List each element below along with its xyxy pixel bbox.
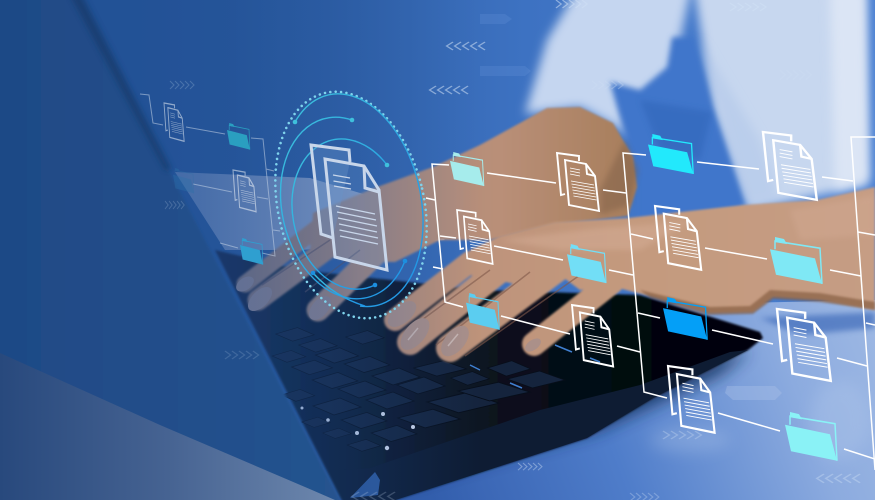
- light table band behind keyboard: [175, 172, 445, 250]
- left faded network connectors: [140, 94, 280, 256]
- blue shirt interior: [610, 37, 745, 222]
- back hand finger gaps: [262, 240, 360, 292]
- faded folder upper left: [227, 123, 250, 150]
- document icon 4: [572, 305, 613, 366]
- faint arrow bands: [480, 14, 531, 76]
- desk surface: [340, 300, 875, 500]
- keyboard keys: [272, 328, 565, 451]
- faded folder lower left: [240, 238, 263, 265]
- inner arcs: [280, 94, 423, 307]
- document icon 1: [557, 153, 599, 211]
- folder icon b: [567, 244, 606, 283]
- hand shading: [640, 290, 875, 315]
- faded folder behind screen: [173, 168, 194, 193]
- arc end dots: [293, 118, 389, 167]
- folder icon c: [466, 293, 499, 330]
- central documents: [311, 145, 387, 270]
- laptop corner highlight: [350, 472, 380, 498]
- faded doc icon middle left: [233, 170, 256, 212]
- dotted ring: [254, 77, 448, 333]
- screen reflection wedge: [0, 353, 335, 500]
- folder icon e: [770, 237, 822, 284]
- document icon 5: [763, 132, 817, 200]
- blue tint over left part of photo: [0, 0, 480, 500]
- desk shadow below wrist: [760, 312, 875, 335]
- back hand and forearm: [233, 107, 638, 324]
- laptop screen foreground panel: [0, 0, 344, 500]
- screen edge shadow: [70, 0, 172, 170]
- connector lines: [426, 137, 875, 470]
- laptop shadow on desk: [344, 350, 750, 500]
- folder icon a: [450, 152, 484, 186]
- back hand nails: [233, 273, 335, 324]
- laptop base and keyboard: [215, 250, 763, 500]
- document icon 6: [777, 309, 831, 381]
- folder icon g: [785, 412, 837, 461]
- decorative chevrons: [165, 0, 860, 500]
- circular document emblem: [254, 77, 448, 333]
- keyboard key lights: [300, 406, 415, 450]
- white shirt front: [693, 0, 868, 210]
- document icon 3: [655, 206, 701, 270]
- desk soft reflections: [650, 380, 870, 460]
- folder icon f: [663, 297, 707, 340]
- faded doc icon upper left: [164, 103, 184, 141]
- document icon 2: [457, 210, 493, 264]
- folder icon d: [648, 134, 693, 174]
- front hand and forearm: [383, 187, 875, 361]
- document icon 7: [668, 366, 715, 433]
- back hand shadow: [600, 140, 638, 215]
- front hand nails: [383, 296, 543, 361]
- nail highlights: [408, 328, 458, 346]
- light shirt sleeve: [525, 0, 868, 205]
- finger gaps: [415, 270, 580, 356]
